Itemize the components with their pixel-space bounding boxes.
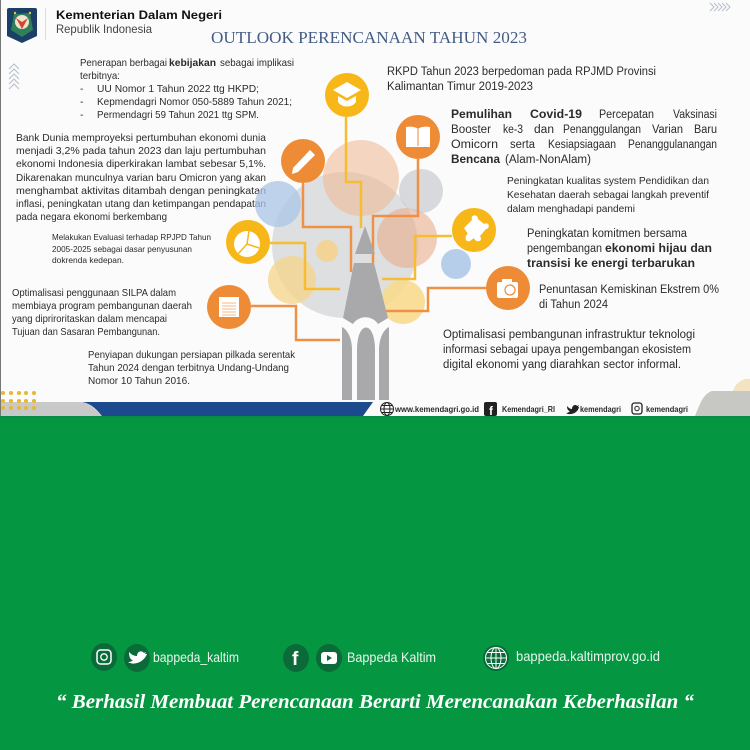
footer: Kemendagri social links: kemendagri xyxy=(646,405,688,414)
text: Pemulihan Covid-19: Percepatan xyxy=(599,109,654,121)
icon: puzzle piece xyxy=(452,208,496,252)
text: Pemulihan Covid-19: Penanggulanangan xyxy=(628,139,717,151)
text: Pemulihan Covid-19: ke-3 xyxy=(503,124,523,136)
footer: Kemendagri social links xyxy=(380,402,688,418)
text: kebijakan: Permendagri 59 Tahun 2021 ttg SPM. xyxy=(97,109,259,121)
icon: chevrons up xyxy=(9,64,19,89)
text: Bank Dunia: inflasi, peningkatan utang dan ketimpangan pendapatan xyxy=(16,198,266,210)
text: Pemulihan Covid-19: dan xyxy=(534,124,554,136)
text: Bank Dunia: ekonomi Indonesia diperkirakan lambat sebesar 5,1%. xyxy=(16,158,266,170)
text: kemiskinan: di Tahun 2024 xyxy=(539,299,609,311)
text: Pemulihan Covid-19: Baru xyxy=(694,124,717,136)
text: kebijakan: - xyxy=(80,109,84,121)
text: kemiskinan xyxy=(539,284,719,311)
header: ministry name: Republik Indonesia xyxy=(56,22,152,36)
text: kebijakan: UU Nomor 1 Tahun 2022 ttg HKPD; xyxy=(97,83,259,95)
header: ministry name: Kementerian Dalam Negeri xyxy=(56,10,222,22)
text: Pemulihan Covid-19: Varian xyxy=(652,124,683,136)
text: Bank Dunia xyxy=(16,132,266,223)
icon: pie chart xyxy=(226,220,270,264)
text: ekonomi hijau: pengembangan xyxy=(527,243,602,255)
text: SILPA xyxy=(12,287,192,338)
text: SILPA: membiaya program pembangunan daerah xyxy=(12,300,192,312)
text: infrastruktur teknologi: informasi sebagai upaya pengembangan ekosistem xyxy=(443,344,691,356)
text: Bank Dunia: menghambat aktivitas ditambah dengan peningkatan xyxy=(16,185,266,197)
text: Pemulihan Covid-19: Vaksinasi xyxy=(673,109,717,121)
diagram: idea tree xyxy=(207,73,530,400)
logo: ministry shield xyxy=(7,8,46,43)
footer: Bappeda social handles: Bappeda Kaltim xyxy=(347,649,436,665)
text: infrastruktur teknologi: Optimalisasi pembangunan infrastruktur teknologi xyxy=(443,329,695,341)
text: ekonomi hijau: transisi ke energi terbarukan xyxy=(527,258,695,270)
text: pilkada xyxy=(88,349,296,387)
text: pendidikan dan kesehatan: dalam menghadapi pandemi xyxy=(507,203,635,215)
text: SILPA: Optimalisasi penggunaan SILPA dalam xyxy=(12,287,176,299)
footer: Bappeda social handles xyxy=(91,643,660,672)
text: Pemulihan Covid-19: Pemulihan xyxy=(451,109,512,121)
footer: Bappeda social handles: bappeda.kaltimprov.go.id xyxy=(516,648,660,664)
bottom band xyxy=(1,379,750,416)
text: Bank Dunia: menjadi 3,2% pada tahun 2023 dan laju pertumbuhan xyxy=(16,145,266,157)
text: evaluasi RPJPD xyxy=(52,232,211,265)
footer: Kemendagri social links: Kemendagri_RI xyxy=(502,405,555,414)
text: Pemulihan Covid-19: Bencana xyxy=(451,154,501,166)
text: Pemulihan Covid-19: Kesiapsiagaan xyxy=(548,139,616,151)
text: SILPA: yang dipriroritaskan dalam mencapai xyxy=(12,313,167,325)
text: kebijakan: Penerapan berbagai xyxy=(80,57,167,69)
text: Pemulihan Covid-19: Booster xyxy=(451,124,491,136)
text: ekonomi hijau xyxy=(527,228,712,270)
text: evaluasi RPJPD: dokrenda kedepan. xyxy=(52,255,124,265)
text: evaluasi RPJPD: 2005-2025 sebagai dasar penyusunan xyxy=(52,244,192,254)
text: RKPD: RKPD Tahun 2023 berpedoman pada RPJMD Provinsi xyxy=(387,66,656,78)
text: Bank Dunia: Bank Dunia memproyeksi pertumbuhan ekonomi dunia xyxy=(16,132,266,144)
text: kebijakan: - xyxy=(80,96,84,108)
text: kebijakan: sebagai implikasi xyxy=(220,57,294,69)
footer: Bappeda social handles: f xyxy=(292,649,299,670)
text: evaluasi RPJPD: Melakukan Evaluasi terhadap RPJPD Tahun xyxy=(52,232,211,242)
icon: pencil xyxy=(281,139,325,183)
text: SILPA: Tujuan dan Sasaran Pembangunan. xyxy=(12,326,160,338)
text: kebijakan: - xyxy=(80,83,84,95)
icon: calendar xyxy=(207,285,251,329)
text: kebijakan xyxy=(80,57,294,121)
text: Pemulihan Covid-19 xyxy=(451,109,717,166)
text: kebijakan: Kepmendagri Nomor 050-5889 Tahun 2021; xyxy=(97,96,292,108)
text: RKPD xyxy=(387,66,656,93)
central pencil xyxy=(342,226,389,400)
text: kebijakan: kebijakan xyxy=(169,57,216,69)
text: pendidikan dan kesehatan: Kesehatan daerah sebagai langkah preventif xyxy=(507,189,709,201)
text: ekonomi hijau: ekonomi hijau dan xyxy=(605,243,712,255)
connector lines xyxy=(251,117,487,340)
text: pilkada: Tahun 2024 dengan terbitnya Undang-Undang xyxy=(88,362,289,374)
footer: Kemendagri social links: kemendagri xyxy=(580,405,621,414)
icon: graduation cap xyxy=(325,73,369,117)
text: Pemulihan Covid-19: Penanggulangan xyxy=(563,124,641,136)
title: OUTLOOK PERENCANAAN TAHUN 2023 xyxy=(211,28,527,47)
text: infrastruktur teknologi xyxy=(443,329,695,371)
footer: Bappeda social handles: bappeda_kaltim xyxy=(153,649,239,665)
footer: Kemendagri social links: www.kemendagri.go.id xyxy=(394,405,479,414)
text: kebijakan: terbitnya: xyxy=(80,70,120,82)
icon: chevrons right xyxy=(710,3,730,11)
text: Pemulihan Covid-19: serta xyxy=(510,139,536,151)
header: ministry name xyxy=(56,10,222,36)
decorative dots xyxy=(1,391,36,410)
text: Pemulihan Covid-19: (Alam-NonAlam) xyxy=(505,154,591,166)
text: kemiskinan: Penuntasan Kemiskinan Ekstrem 0% xyxy=(539,284,719,296)
text: infrastruktur teknologi: digital ekonomi yang diarahkan sector informal. xyxy=(443,359,681,371)
text: ekonomi hijau: Peningkatan komitmen bersama xyxy=(527,228,688,240)
tagline: “ Berhasil Membuat Perencanaan Berarti Merencanakan Keberhasilan “ xyxy=(56,692,694,713)
text: Bank Dunia: pada negara ekonomi berkembang xyxy=(16,211,167,223)
text: Bank Dunia: Dikarenakan munculnya varian baru Omicron yang akan xyxy=(16,172,266,184)
icon: camera xyxy=(486,266,530,310)
text: pilkada: Nomor 10 Tahun 2016. xyxy=(88,375,190,387)
text: Pemulihan Covid-19: Omicorn xyxy=(451,139,498,151)
text: pilkada: Penyiapan dukungan persiapan pilkada serentak xyxy=(88,349,296,361)
text: RKPD: Kalimantan Timur 2019-2023 xyxy=(387,81,533,93)
footer: Kemendagri social links: f xyxy=(489,404,494,418)
background circles xyxy=(255,140,471,324)
icon: book xyxy=(396,115,440,159)
text: Pemulihan Covid-19: Covid-19 xyxy=(530,109,582,121)
text: pendidikan dan kesehatan xyxy=(507,175,709,215)
text: pendidikan dan kesehatan: Peningkatan kualitas system Pendidikan dan xyxy=(507,175,709,187)
